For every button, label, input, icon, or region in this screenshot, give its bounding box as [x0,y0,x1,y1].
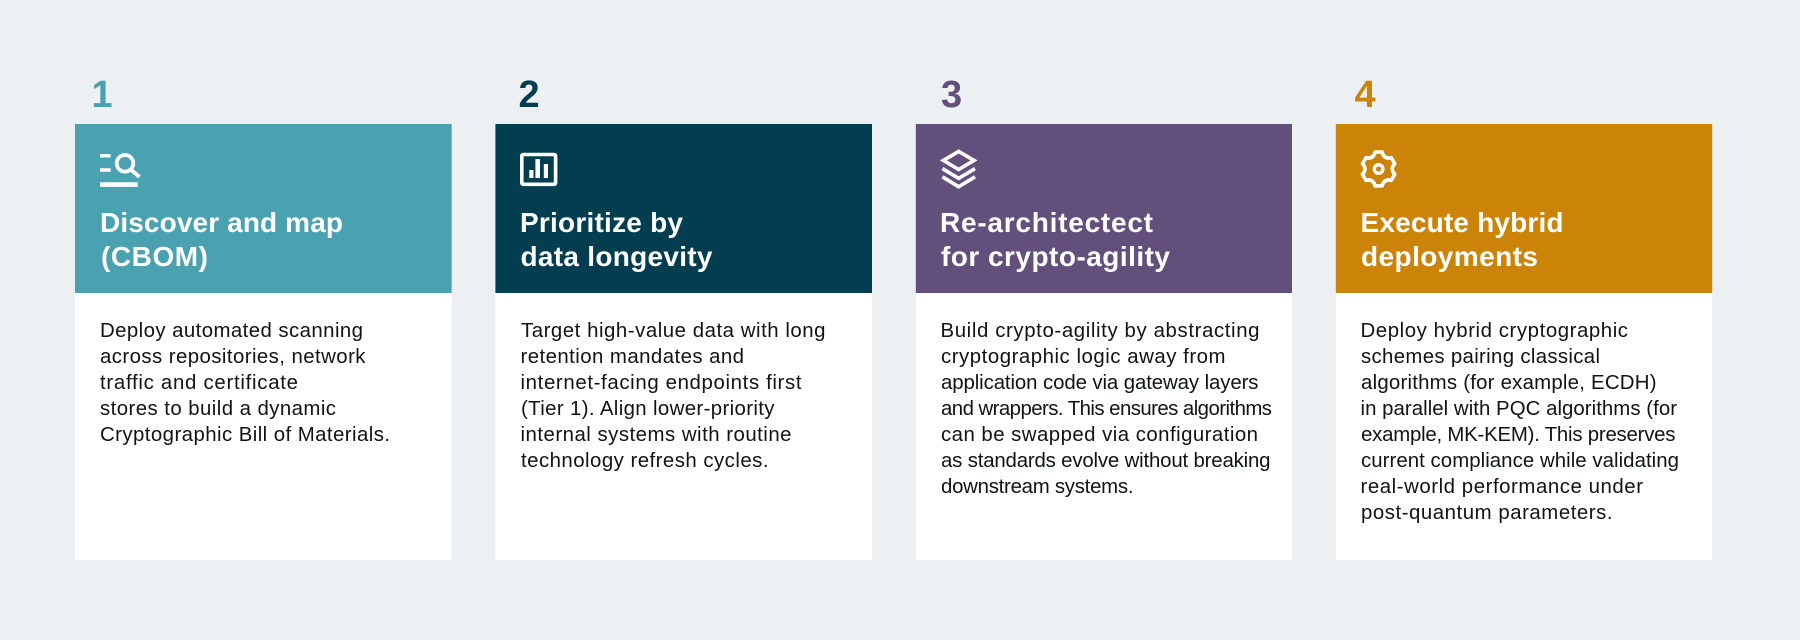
heading 4: Execute hybrid [1360,207,1564,238]
body text 2: internet-facing endpoints first [520,372,802,394]
body panel 1 [75,124,452,560]
body text 3: can be swapped via configuration [941,424,1258,446]
body text 1: Cryptographic Bill of Materials. [100,424,390,446]
heading 2: data longevity [520,241,713,272]
body text 2: internal systems with routine [520,424,792,446]
heading 1: (CBOM) [101,241,208,272]
body panel 3 [916,124,1292,560]
header band 3 [916,124,1292,293]
step number 2: 2 [518,74,540,116]
body text 1: stores to build a dynamic [100,398,336,420]
heading 1: Discover and map [100,207,343,238]
panel: step 2 [495,74,872,560]
body text 1: Deploy automated scanning [100,320,363,342]
body text 4: algorithms (for example, ECDH) [1361,372,1656,394]
body text 4: current compliance while validating [1361,450,1679,472]
body panel 2 [495,124,872,560]
body text 4: in parallel with PQC algorithms (for [1360,398,1677,420]
body text 2: retention mandates and [520,346,744,368]
icon: gear [1362,152,1395,186]
body text 2: Target high-value data with long [521,320,826,342]
header band 1 [75,124,452,293]
heading 2: Prioritize by [520,207,683,238]
panel: step 3 [916,74,1292,560]
body text 3: Build crypto-agility by abstracting [940,320,1260,342]
step number 1: 1 [92,74,113,116]
body text 4: Deploy hybrid cryptographic [1360,320,1628,342]
body text 3: cryptographic logic away from [941,346,1226,368]
panel: step 1 [75,74,452,560]
body text 4: schemes pairing classical [1361,346,1600,368]
body text 1: across repositories, network [100,346,366,368]
body text 2: technology refresh cycles. [521,450,768,472]
icon: stacked layers [942,151,975,187]
body text 2: (Tier 1). Align lower-priority [521,398,775,420]
icon: bar chart [522,154,556,184]
panel: step 4 [1336,74,1712,560]
body text 3: as standards evolve without breaking [941,450,1270,472]
header band 2 [495,124,872,293]
heading 3: for crypto-agility [941,241,1170,272]
heading 4: deployments [1361,241,1538,272]
step number 3: 3 [941,74,962,116]
body text 3: downstream systems. [941,476,1134,498]
body text 4: example, MK-KEM). This preserves [1361,424,1676,446]
step number 4: 4 [1354,74,1376,116]
body text 3: application code via gateway layers [941,372,1258,394]
heading 3: Re-architectect [940,207,1153,238]
icon: list search [100,155,140,185]
body text 4: real-world performance under [1360,476,1643,498]
body text 3: and wrappers. This ensures algorithms [941,398,1272,420]
body text 4: post-quantum parameters. [1361,502,1612,524]
body text 1: traffic and certificate [100,372,298,394]
header band 4 [1336,124,1712,293]
body panel 4 [1336,124,1712,560]
